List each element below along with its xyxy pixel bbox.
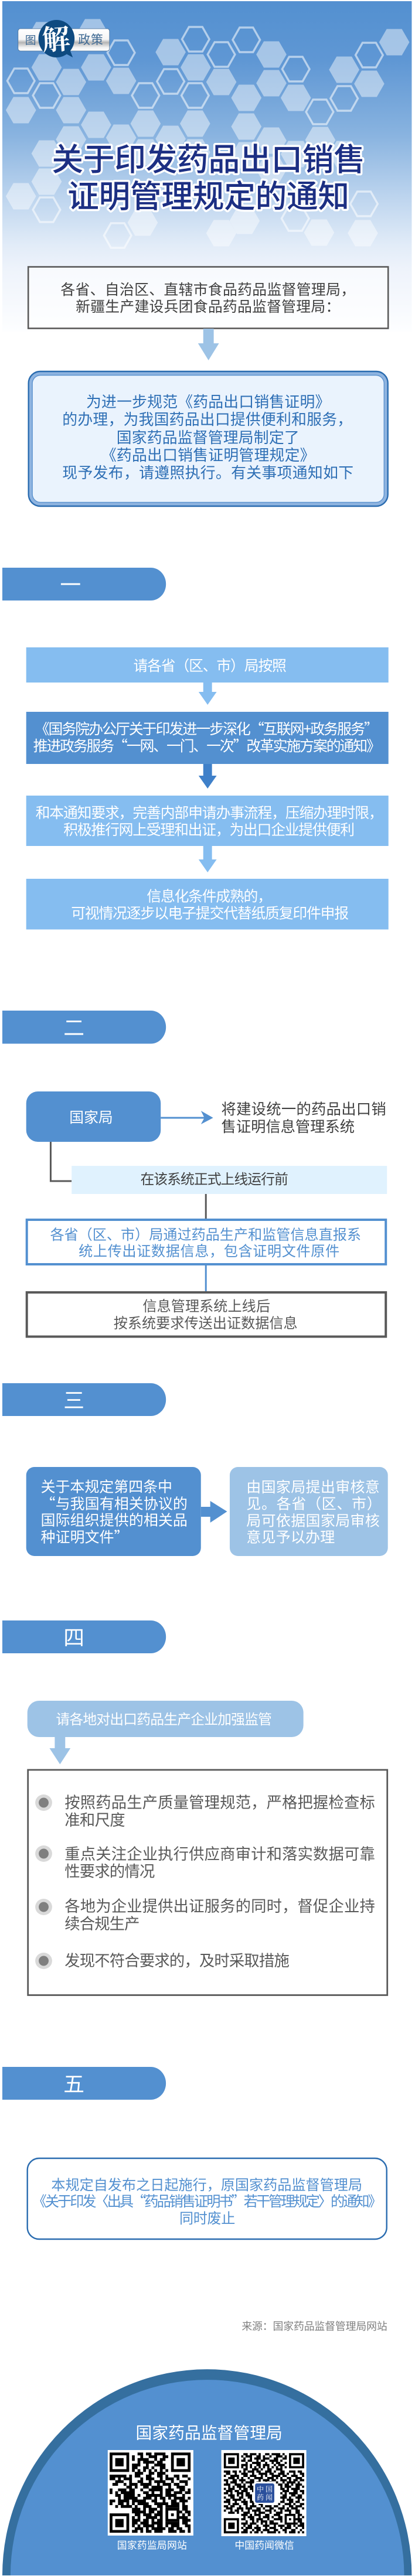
step: 国务院办公厅文件: 推进政务服务“一网、一门、一次”改革实施方案的通知》 (33, 735, 381, 756)
blue connector (205, 1265, 207, 1291)
box: 审核意见: 局可依据国家局审核 (246, 1513, 380, 1530)
bullet 2: 性要求的情况 (64, 1862, 155, 1881)
box: 审核意见 (230, 1467, 388, 1556)
addressee box (28, 267, 388, 328)
intro box: 《药品出口销售证明管理规定》 (101, 447, 315, 464)
bullet 2: 重点关注企业执行供应商审计和落实数据可靠 (64, 1845, 375, 1863)
bullet 3: 各地为企业提供出证服务的同时，督促企业持 (64, 1898, 375, 1915)
title (52, 142, 365, 214)
title: 证明管理规定的通知 (67, 179, 349, 214)
addressee box: 各省、自治区、直辖市食品药品监督管理局， (60, 282, 355, 298)
logo: 中国药闻: 中国 (257, 2484, 273, 2494)
section heading: 一: 一 (60, 574, 81, 597)
text: 统一系统: 售证明信息管理系统 (222, 1119, 355, 1135)
section heading: 三: 三 (63, 1389, 84, 1412)
logo: 中国药闻 (255, 2483, 274, 2503)
box: 国家局: 国家局 (69, 1110, 113, 1126)
bullet 4: 发现不符合要求的，及时采取措施 (64, 1952, 290, 1970)
arrow (201, 1501, 227, 1523)
arrow (49, 1737, 70, 1765)
intro box (29, 371, 388, 506)
box: 施行与废止 (28, 2158, 387, 2239)
section heading: 二 (2, 1011, 166, 1044)
connector lines (50, 1142, 206, 1219)
bullet 1 (35, 1794, 375, 1829)
bullet 2 (35, 1845, 375, 1881)
bullet 3: 续合规生产 (64, 1915, 140, 1933)
QR code: website (108, 2450, 193, 2536)
box: 各省上传: 各省（区、市）局通过药品生产和监管信息直报系 (50, 1227, 361, 1243)
section heading: 一 (2, 568, 166, 601)
band: 在该系统正式上线运行前 (72, 1166, 387, 1194)
arrow (199, 764, 217, 789)
text: 统一系统: 将建设统一的药品出口销 (222, 1101, 386, 1118)
pill: 加强监管 (28, 1701, 304, 1737)
text: 统一系统 (222, 1101, 386, 1135)
source: 来源：国家药品监督管理局网站 (241, 2321, 387, 2332)
step: 请各省（区、市）局按照: 请各省（区、市）局按照 (134, 658, 287, 674)
arrow (198, 329, 219, 360)
step: 完善内部流程: 积极推行网上受理和出证，为出口企业提供便利 (63, 822, 355, 838)
logo: 图解政策: 解 (40, 16, 72, 59)
box: 施行与废止: 《关于印发〈出具“药品销售证明书”若干管理规定〉的通知》 (33, 2190, 382, 2210)
arrow (199, 683, 217, 705)
QR code: wechat (222, 2450, 307, 2536)
band: 在该系统正式上线运行前: 在该系统正式上线运行前 (140, 1172, 288, 1188)
list panel (28, 1770, 387, 1995)
step: 电子提交: 信息化条件成熟的， (147, 888, 272, 905)
logo: 图解政策 (18, 16, 110, 59)
QR caption: wechat: 中国药闻微信 (234, 2540, 294, 2551)
footer dome (2, 2369, 411, 2575)
step: 国务院办公厅文件 (26, 712, 389, 764)
box: 第四条: 关于本规定第四条中 (41, 1475, 172, 1497)
arrow to system (161, 1111, 213, 1124)
footer title: 国家药品监督管理局 (135, 2424, 283, 2442)
box: 第四条 (26, 1467, 201, 1556)
QR caption: website: 国家药监局网站 (117, 2540, 187, 2551)
step: 请各省（区、市）局按照 (26, 647, 389, 683)
step: 电子提交 (26, 879, 389, 929)
step: 电子提交: 可视情况逐步以电子提交代替纸质复印件申报 (71, 905, 349, 922)
box: 各省上传: 统上传出证数据信息，包含证明文件原件 (79, 1244, 339, 1260)
box: 审核意见: 意见予以办理 (246, 1529, 335, 1546)
intro box: 的办理，为我国药品出口提供便利和服务， (62, 411, 352, 428)
section heading: 四: 四 (63, 1626, 84, 1650)
box: 施行与废止: 本规定自发布之日起施行，原国家药品监督管理局 (51, 2178, 362, 2193)
box: 审核意见: 见。各省（区、市） (246, 1496, 382, 1513)
box: 第四条: 国际组织提供的相关品 (41, 1509, 188, 1530)
bullet 3 (35, 1898, 375, 1933)
step: 国务院办公厅文件: 《国务院办公厅关于印发进一步深化“互联网+政务服务” (35, 718, 379, 739)
bullet 1: 按照药品生产质量管理规范，严格把握检查标 (64, 1794, 375, 1811)
box: 系统上线后: 按系统要求传送出证数据信息 (114, 1316, 298, 1332)
section heading: 五: 五 (63, 2073, 84, 2096)
logo: 中国药闻: 药闻 (257, 2492, 273, 2502)
hexagon pattern (6, 19, 409, 248)
step: 完善内部流程 (26, 796, 389, 846)
box: 第四条: 种证明文件” (41, 1526, 129, 1547)
section heading: 四 (2, 1620, 166, 1653)
title: 关于印发药品出口销售 (52, 142, 365, 178)
intro box: 国家药品监督管理局制定了 (117, 429, 300, 446)
step: 完善内部流程: 和本通知要求，完善内部申请办事流程，压缩办理时限， (36, 805, 383, 821)
logo: 图解政策: 政策 (78, 33, 103, 47)
box: 国家局 (26, 1091, 161, 1142)
box: 系统上线后: 信息管理系统上线后 (142, 1299, 270, 1315)
arrow (199, 846, 217, 872)
section heading: 五 (2, 2067, 166, 2100)
addressee box: 新疆生产建设兵团食品药品监督管理局： (76, 299, 340, 315)
intro box: 为进一步规范《药品出口销售证明》 (86, 394, 330, 411)
logo: 图解政策: 图 (25, 35, 36, 47)
box: 第四条: “与我国有相关协议的 (41, 1492, 188, 1514)
box: 各省上传 (27, 1220, 386, 1264)
header banner (2, 1, 411, 332)
section heading: 二: 二 (63, 1016, 84, 1040)
section heading: 三 (2, 1383, 166, 1416)
intro box: 现予发布，请遵照执行。有关事项通知如下 (62, 465, 353, 482)
box: 审核意见: 由国家局提出审核意 (246, 1479, 380, 1496)
box: 系统上线后 (27, 1292, 386, 1337)
pill: 加强监管: 请各地对出口药品生产企业加强监管 (56, 1712, 272, 1728)
bullet 1: 准和尺度 (64, 1811, 125, 1829)
box: 施行与废止: 同时废止 (179, 2211, 235, 2227)
